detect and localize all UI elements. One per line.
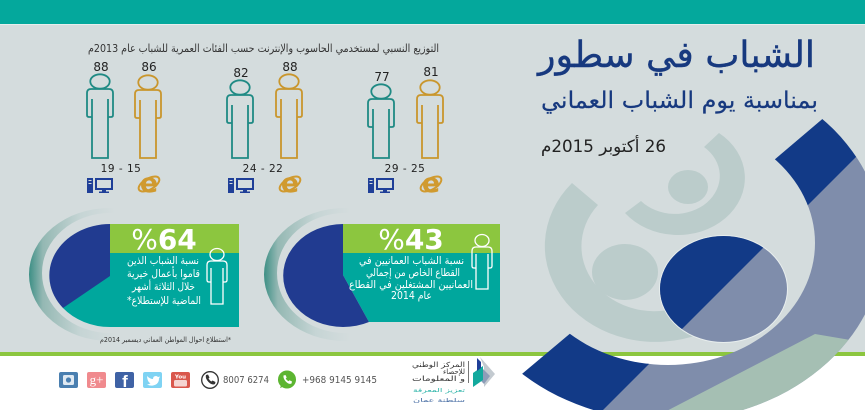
icon: youtube: You: [174, 374, 186, 380]
icon: computer 25-29: [368, 178, 394, 193]
description: العمانيين المشتغلين في القطاع: [349, 279, 473, 291]
logo: national centre for statistics and information: و المعلومات: [412, 375, 465, 383]
tagline: تعزيز المعرفة: [413, 388, 466, 394]
green header: [343, 224, 500, 253]
computer users figure 77: [368, 84, 394, 158]
logo: national centre for statistics and information: للإحصاء: [443, 368, 465, 376]
date: 26 أكتوبر 2015م: [541, 135, 666, 157]
top teal band: [0, 0, 865, 24]
title: الشباب في سطور: [536, 35, 815, 76]
age label 15-19: 19 - 15: [101, 163, 141, 175]
background panel: [0, 24, 865, 352]
description: عام 2014: [391, 290, 432, 302]
figure chart: age 15-19: [87, 74, 161, 158]
pie slice: [283, 224, 369, 327]
gradient crescent: [264, 208, 426, 341]
icon: google plus: g+: [90, 372, 103, 387]
value 82: 82: [233, 66, 249, 80]
green divider bar: [0, 352, 865, 356]
value 88: 88: [93, 60, 109, 74]
internet users figure 88: [276, 74, 302, 158]
icon: telephone: [202, 372, 218, 388]
description: نسبة الشباب العمانيين في: [359, 255, 464, 267]
value 77: 77: [374, 70, 390, 84]
icon: internet browser 22-24: e: [281, 168, 299, 199]
icon: person: [207, 248, 227, 304]
icon: internet browser 25-29: e: [422, 168, 440, 199]
description: [127, 255, 201, 307]
logo mark: [480, 357, 495, 387]
description: خلال الثلاثة أشهر: [131, 279, 195, 293]
internet users figure 86: [135, 75, 161, 158]
emblem centre disc: [660, 236, 788, 342]
subtitle: بمناسبة يوم الشباب العماني: [541, 88, 818, 114]
age label 25-29: 29 - 25: [385, 163, 425, 175]
panel: 43 percent private sector: [264, 208, 500, 341]
computer users figure 88: [87, 74, 113, 158]
value 88: 88: [282, 60, 298, 74]
large emblem ring: [522, 119, 865, 410]
value 64 percent: %64: [131, 223, 197, 256]
age label 22-24: 24 - 22: [243, 163, 283, 175]
panel: 64 percent volunteering: [29, 208, 239, 341]
internet users figure 81: [417, 80, 443, 158]
icon: whatsapp: [278, 370, 296, 388]
value 43 percent: %43: [378, 223, 444, 256]
icon: instagram: [59, 372, 78, 388]
description: [349, 255, 473, 302]
decorative emblem watermark: [545, 133, 745, 342]
gradient crescent: [29, 208, 191, 341]
organisation name: المركز الوطني: [412, 361, 465, 369]
green header: [110, 224, 239, 253]
footer social icons: [59, 372, 190, 391]
description: القطاع الخاص من إجمالي: [366, 267, 460, 279]
chart heading: التوزيع النسبي لمستخدمي الحاسوب والإنترنت حسب الفئات العمرية للشباب عام 2013م: [88, 42, 439, 55]
teal card: [343, 253, 500, 322]
whatsapp number: +968 9145 9145: [302, 375, 377, 386]
logo: national centre for statistics and information: [412, 357, 495, 404]
teal card: [63, 253, 239, 327]
description: نسبة الشباب الذين: [127, 255, 199, 267]
icon: twitter: [143, 372, 162, 388]
phone number: 8007 6274: [223, 375, 269, 386]
country: سلطنة عمان: [413, 398, 466, 404]
icon: computer 15-19: [87, 178, 113, 193]
figure chart: age 22-24: [227, 74, 302, 158]
description: الماضية للإستطلاع*: [127, 295, 201, 307]
value 81: 81: [423, 65, 439, 79]
computer users figure 82: [227, 80, 253, 158]
icon: facebook: f: [122, 372, 128, 391]
icon: computer 22-24: [228, 178, 254, 193]
value 86: 86: [141, 60, 157, 74]
footnote: *استطلاع احوال المواطن العماني ديسمبر 2014م: [100, 336, 231, 344]
figure chart: age 25-29: [368, 80, 443, 158]
icon: internet browser 15-19: e: [140, 168, 158, 199]
description: قاموا بأعمال خيرية: [127, 266, 200, 280]
icon: person: [472, 234, 492, 289]
pie slice: [49, 224, 110, 308]
